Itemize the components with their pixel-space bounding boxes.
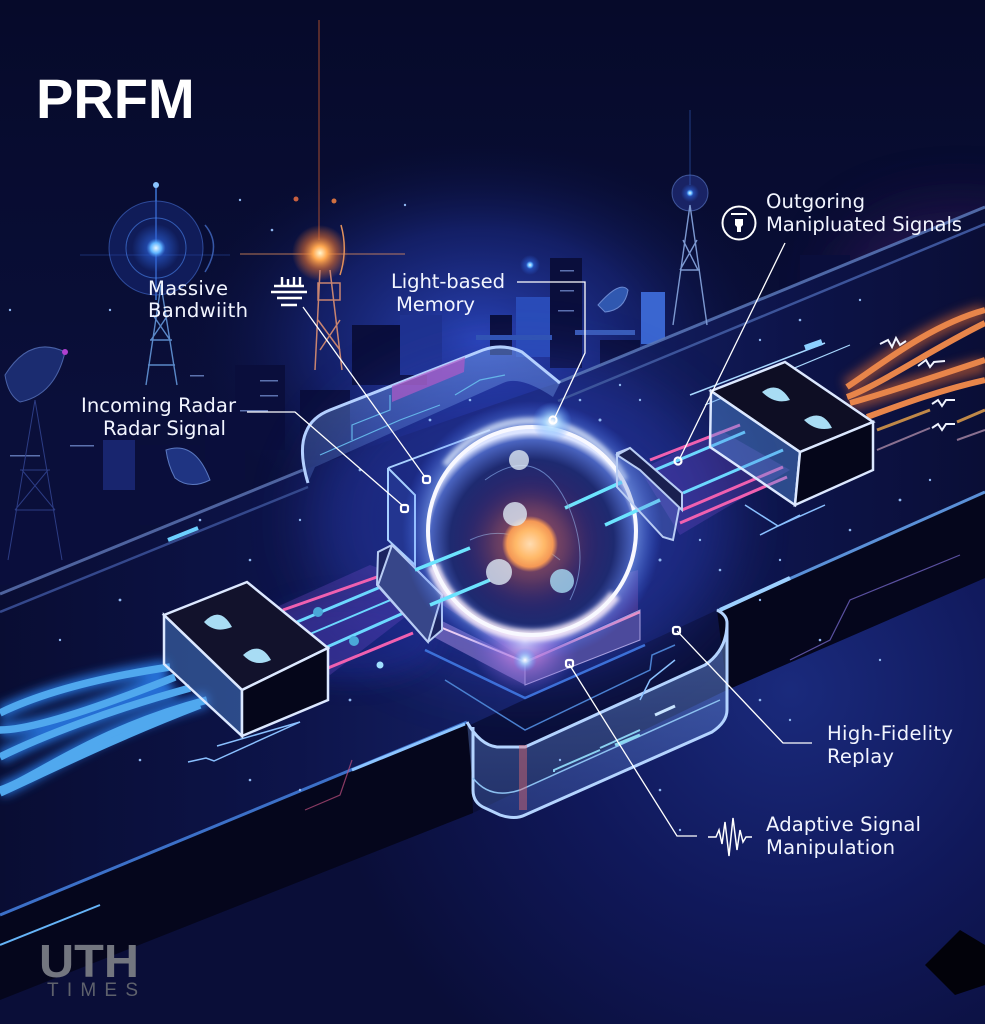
leader: memory [517, 282, 585, 424]
particle dust [9, 199, 931, 841]
label: Light-based Memory [391, 270, 505, 316]
label: High-Fidelity Replay [827, 722, 953, 768]
leader: adaptive [566, 660, 697, 836]
icon: outgoing signals badge [722, 206, 756, 240]
leader: incoming signal [247, 412, 408, 512]
title: PRFM [36, 67, 195, 130]
label: High-Fidelity Replay: High-Fidelity [827, 722, 953, 745]
leader: bandwidth [303, 307, 430, 483]
label: Adaptive Signal Manipulation: Manipulation [766, 836, 895, 859]
incoming fibre glow [0, 667, 207, 790]
circuit traces [188, 505, 825, 762]
front glass housing [467, 610, 727, 818]
label: Incoming Radar Signal [81, 394, 237, 440]
inner glass frame [388, 430, 490, 565]
track surface [0, 207, 985, 915]
label: Light-based Memory: Light-based [391, 270, 505, 293]
dishes [5, 347, 65, 402]
label: Outgoing Manipulated Signals: Manipluated Signals [766, 213, 962, 236]
dark buildings [0, 255, 960, 585]
label: Massive Bandwidth: Bandwiith [148, 299, 248, 322]
left connector block [377, 545, 442, 642]
orbit nodes [486, 450, 574, 593]
label: Incoming Radar Signal: Incoming Radar [81, 394, 237, 417]
label: High-Fidelity Replay: Replay [827, 745, 894, 768]
label: Massive Bandwidth: Massive [148, 277, 228, 300]
incoming fibre bundle [0, 667, 207, 793]
rear glass housing [302, 347, 560, 483]
left glass module [164, 582, 328, 736]
blue beacon [520, 255, 540, 275]
rear lattice tower [8, 400, 62, 560]
left signal beams [270, 565, 440, 675]
right radar tower [672, 110, 708, 325]
center radar tower [240, 20, 405, 370]
light rays inside sphere [415, 482, 660, 605]
orange core [502, 516, 558, 572]
leader: replay [673, 627, 812, 743]
label: Incoming Radar Signal: Radar Signal [103, 417, 226, 440]
watermark: UTH [39, 935, 139, 987]
signal squiggles [880, 338, 955, 430]
label: Massive Bandwidth [148, 277, 248, 322]
right signal beams [640, 342, 850, 535]
lit buildings [103, 292, 665, 490]
quantum sphere [402, 401, 662, 661]
label: Outgoing Manipulated Signals [766, 190, 962, 236]
orange city lights [820, 245, 965, 302]
right glass module [710, 362, 873, 505]
outgoing fibre bundle [847, 310, 985, 450]
leader: outgoing [674, 243, 785, 464]
icon: equalizer [271, 277, 307, 305]
city skyline [0, 245, 965, 585]
label: Outgoing Manipulated Signals: Outgoring [766, 190, 865, 213]
label: Light-based Memory: Memory [396, 293, 475, 316]
icon: waveform [708, 818, 752, 856]
right connector block [617, 448, 682, 540]
window lights [10, 270, 574, 456]
left radar tower [80, 182, 230, 385]
top and base flares [513, 402, 572, 672]
label: Adaptive Signal Manipulation [766, 813, 921, 859]
label: Adaptive Signal Manipulation: Adaptive Signal [766, 813, 921, 836]
front walls [0, 492, 985, 1024]
rear rails [0, 207, 985, 612]
watermark: TIMES [47, 980, 138, 1001]
outgoing fibre glow [847, 312, 985, 403]
processor base platform [420, 570, 675, 730]
